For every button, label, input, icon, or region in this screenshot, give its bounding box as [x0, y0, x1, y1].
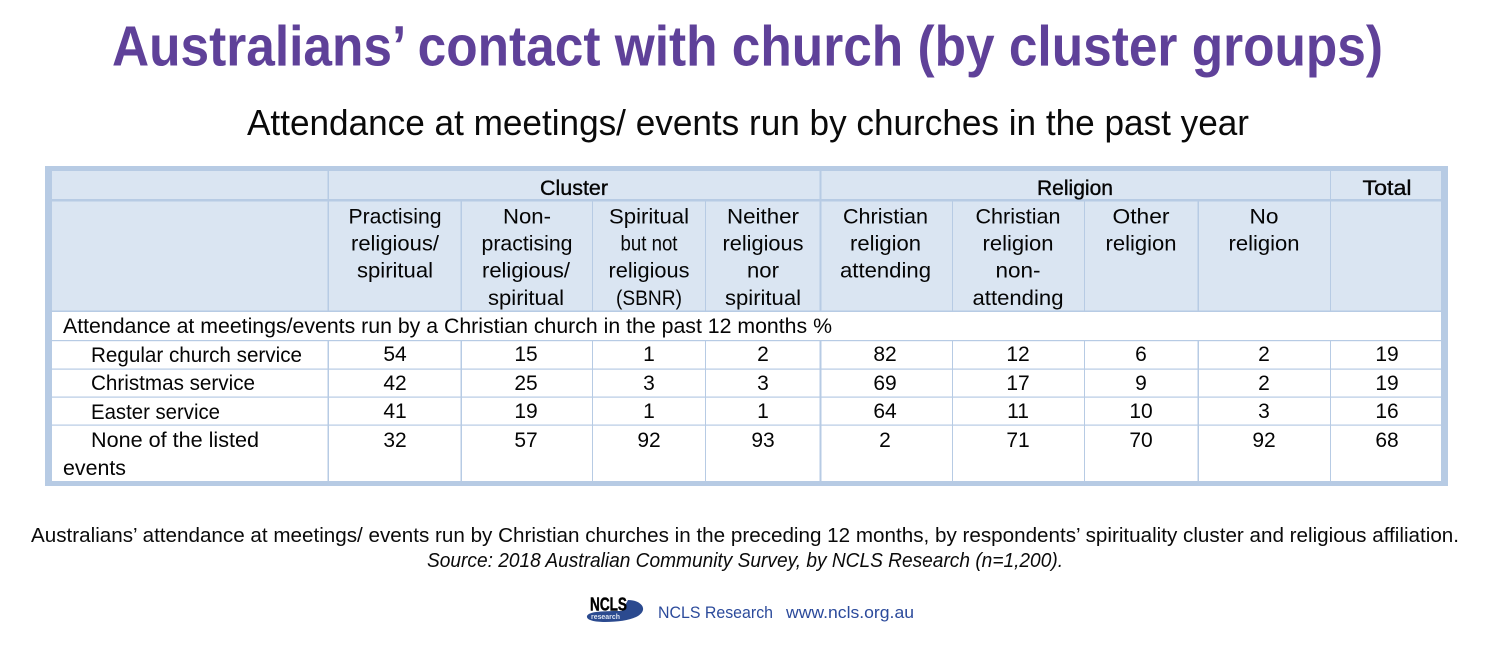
row: regular church service: 15: [514, 343, 538, 366]
row: regular church service: 2: [1258, 343, 1270, 366]
column headers: cluster: Non-: [503, 206, 551, 228]
row: easter service: 1: [643, 400, 655, 423]
row: regular church service: 1: [643, 343, 655, 366]
column headers: cluster: spiritual: [725, 287, 801, 310]
row: christmas service: Christmas service: [91, 372, 255, 395]
row: christmas service: 69: [873, 372, 897, 395]
row: regular church service: 19: [1375, 343, 1399, 366]
row: none of the listed events: 92: [1252, 429, 1276, 452]
column headers: cluster: practising: [482, 232, 572, 256]
icon: NCLS logo: research: [591, 614, 620, 621]
column headers: cluster: nor: [747, 260, 779, 282]
column headers: religion: Christian: [976, 206, 1060, 228]
section heading row: Attendance at meetings/events run by a Christian church in the past 12 months %: [63, 315, 832, 338]
row: regular church service: 82: [873, 343, 897, 366]
column headers: religion: non-: [996, 260, 1041, 282]
column headers: religion: No: [1250, 206, 1278, 228]
row: none of the listed events: 92: [637, 429, 661, 452]
title: Australians’ contact with church (by cluster groups): [112, 14, 1383, 78]
row: regular church service: 54: [383, 343, 407, 366]
column headers: cluster: religious/: [482, 260, 570, 282]
row: easter service: Easter service: [91, 401, 220, 424]
group headers: Religion: [1037, 177, 1113, 200]
row: christmas service: 3: [643, 372, 655, 395]
row: christmas service: 9: [1135, 372, 1147, 395]
data table: [45, 166, 1448, 486]
group headers: Cluster: [540, 177, 608, 200]
column headers: cluster: [348, 206, 804, 310]
row: regular church service: [91, 343, 1399, 367]
column headers: cluster: (SBNR): [616, 287, 682, 310]
row: christmas service: 3: [757, 372, 769, 395]
column headers: cluster: Neither: [727, 206, 799, 228]
row: easter service: 41: [383, 400, 407, 423]
row: christmas service: 2: [1258, 372, 1270, 395]
row: none of the listed events: 57: [514, 429, 538, 452]
column headers: cluster: Spiritual: [609, 206, 689, 228]
column headers: cluster: spiritual: [488, 287, 564, 310]
row: none of the listed events: events: [63, 457, 126, 480]
row: easter service: 64: [873, 400, 897, 423]
icon: NCLS logo: [587, 594, 643, 622]
row: none of the listed events: 71: [1006, 429, 1030, 452]
column headers: religion: religion: [982, 232, 1054, 256]
group headers: Total: [1362, 177, 1412, 200]
column headers: religion: Other: [1112, 206, 1170, 228]
row: christmas service: 42: [383, 372, 407, 395]
column headers: cluster: Practising: [348, 206, 442, 228]
group headers: [540, 177, 1412, 200]
row: christmas service: 19: [1375, 372, 1399, 395]
row: easter service: 16: [1375, 400, 1399, 423]
source note: Source: 2018 Australian Community Survey, by NCLS Research (n=1,200).: [427, 550, 1063, 572]
row: regular church service: 12: [1006, 343, 1030, 366]
column headers: cluster: but not: [620, 232, 678, 256]
row: christmas service: 25: [514, 372, 538, 395]
row: easter service: 10: [1129, 400, 1153, 423]
column headers: cluster: religious: [608, 260, 690, 282]
subtitle: Attendance at meetings/ events run by churches in the past year: [247, 102, 1249, 143]
column headers: religion: attending: [840, 260, 931, 282]
row: easter service: 19: [514, 400, 538, 423]
row: christmas service: [91, 372, 1399, 395]
row: none of the listed events: None of the listed: [91, 429, 259, 452]
column headers: religion: religion: [850, 232, 921, 256]
row: none of the listed events: 2: [879, 429, 891, 452]
icon: NCLS logo: NCLS: [590, 594, 627, 614]
row: easter service: 3: [1258, 400, 1270, 423]
row: regular church service: 2: [757, 343, 769, 366]
column headers: religion: Christian: [843, 206, 928, 228]
column headers: religion: religion: [1106, 232, 1176, 256]
row: christmas service: 17: [1006, 372, 1030, 395]
row: regular church service: Regular church service: [91, 344, 302, 367]
column headers: religion: attending: [972, 287, 1064, 310]
column headers: religion: religion: [1228, 232, 1300, 256]
footer website: www.ncls.org.au: [785, 603, 914, 622]
row: none of the listed events: 93: [751, 429, 775, 452]
column headers: cluster: religious/: [351, 232, 439, 256]
column headers: cluster: spiritual: [357, 260, 433, 282]
row: easter service: 11: [1007, 400, 1029, 423]
row: none of the listed events: [63, 429, 1399, 480]
column headers: religion: [840, 206, 1300, 310]
row: none of the listed events: 68: [1375, 429, 1399, 452]
row: regular church service: 6: [1135, 343, 1147, 366]
row: none of the listed events: 32: [383, 429, 407, 452]
row: easter service: 1: [757, 400, 769, 423]
row: easter service: [91, 400, 1399, 424]
footer name: NCLS Research: [658, 603, 773, 622]
column headers: cluster: religious: [722, 232, 804, 256]
caption: Australians’ attendance at meetings/ events run by Christian churches in the preceding 12 months, by respondents’ spirituality cluster and religious affiliation.: [31, 524, 1459, 547]
row: none of the listed events: 70: [1129, 429, 1153, 452]
